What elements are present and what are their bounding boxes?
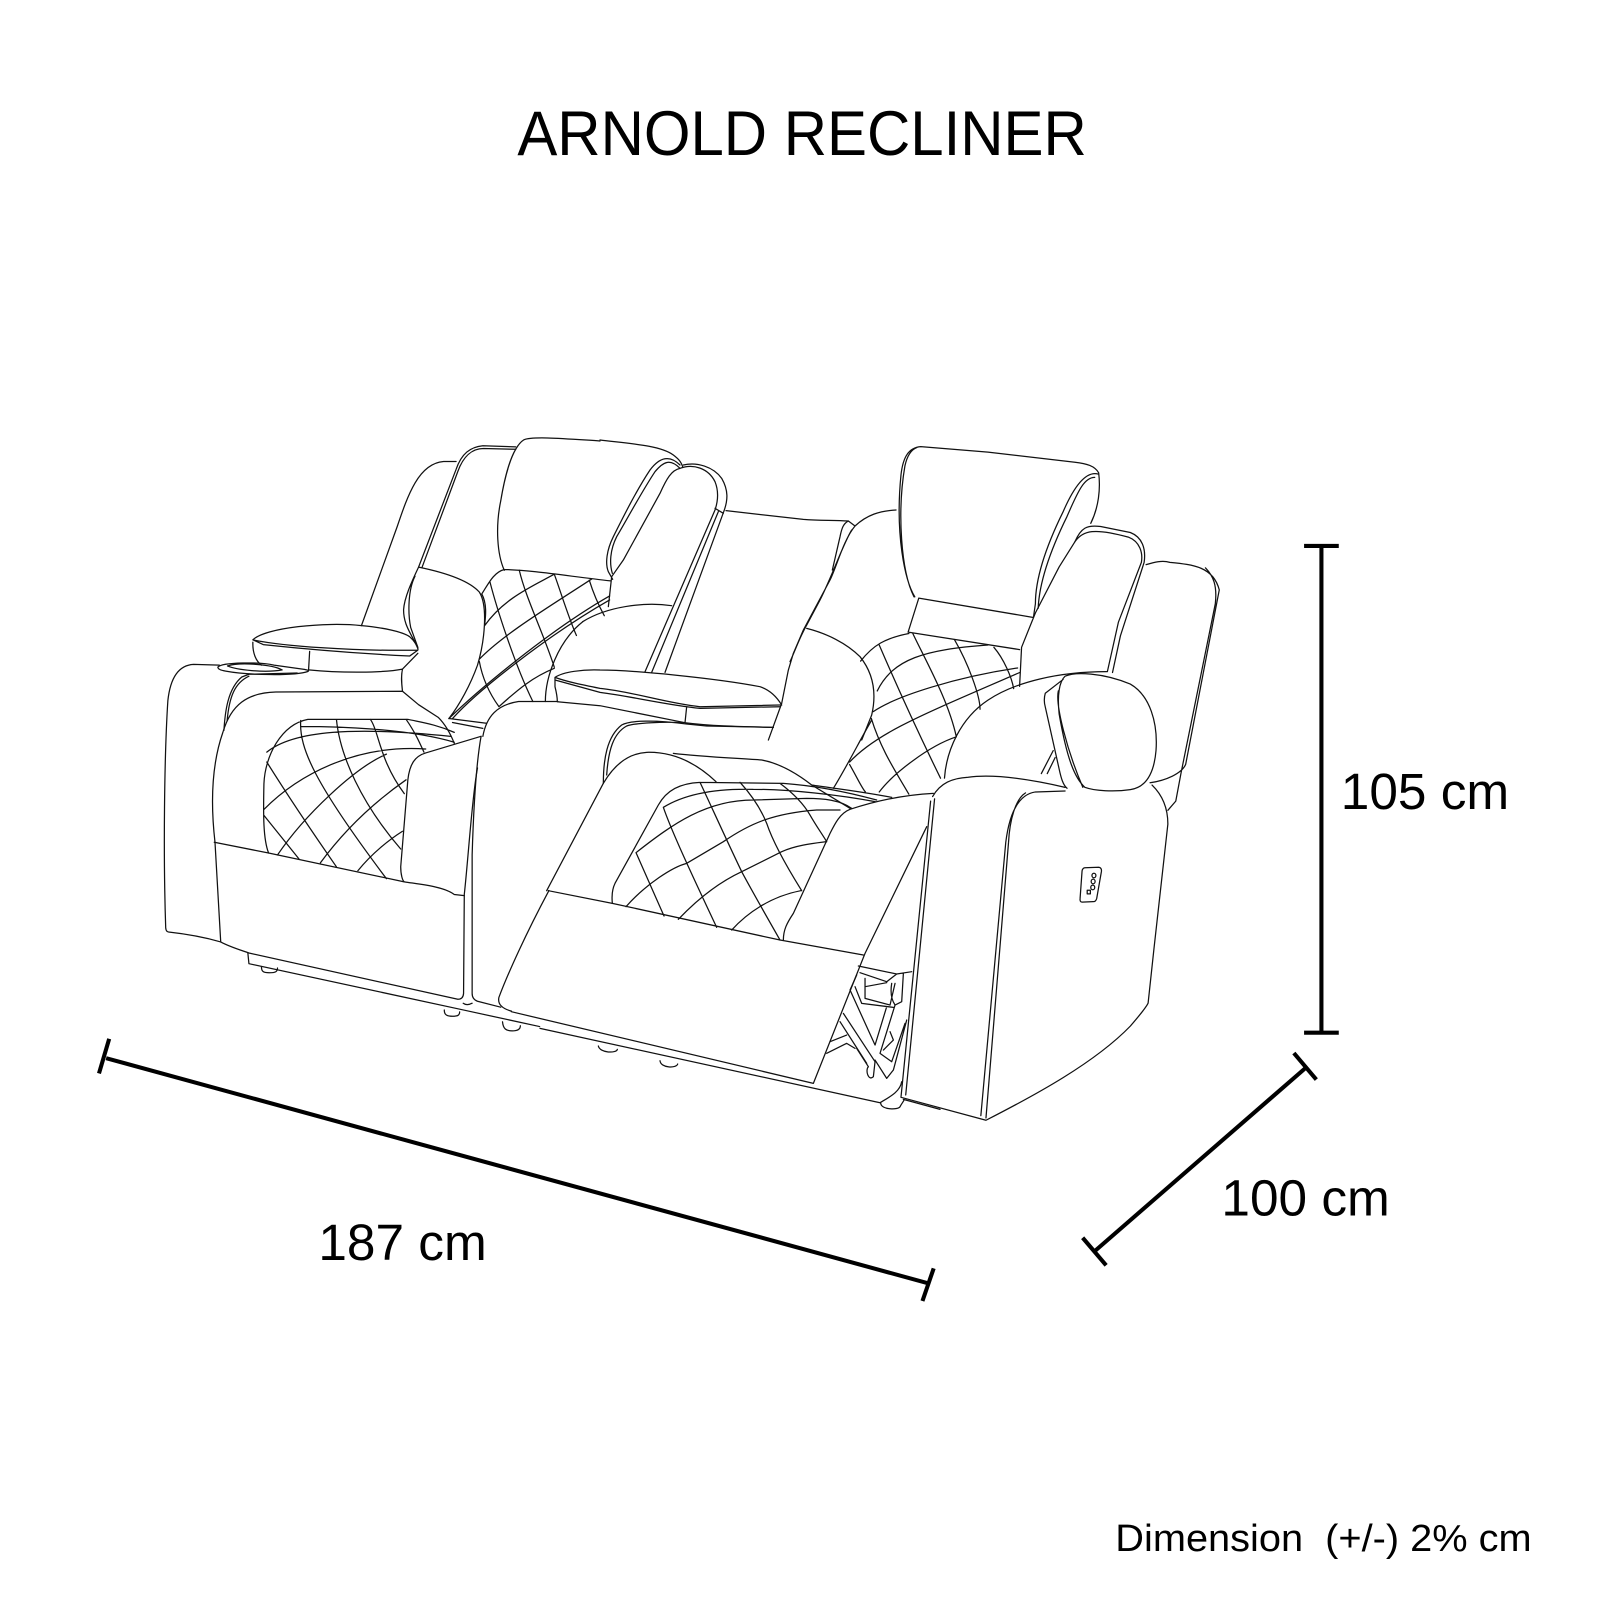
footrest: [511, 827, 927, 1083]
side band: [224, 673, 297, 730]
right recliner seat and footrest: [511, 720, 940, 1109]
power button panel: [1080, 867, 1101, 902]
base and feet: [248, 953, 540, 1031]
left headrest right edge: [600, 440, 683, 607]
height label: 105 cm: [1341, 763, 1509, 820]
lumbar panel: [807, 628, 874, 740]
back diamond quilting: [449, 569, 610, 719]
seat diamond quilting: [264, 719, 454, 879]
centre console: [555, 670, 782, 727]
right pillow top: [583, 604, 672, 622]
inner arm cushion: [401, 736, 481, 896]
right pillow: [545, 622, 583, 702]
wing: [404, 446, 516, 649]
outer arm panel: [164, 664, 221, 942]
recline mechanism: [827, 966, 912, 1078]
centre back and console: [555, 440, 896, 740]
right wing: [1075, 526, 1145, 673]
back cushion curves: [547, 720, 892, 891]
armrest console: [253, 624, 418, 691]
width dimension: [99, 1039, 934, 1301]
depth dimension: [1083, 1053, 1316, 1265]
right headrest: [899, 447, 1099, 617]
headrest: [498, 438, 611, 581]
seat wing between: [645, 464, 727, 672]
depth label: 100 cm: [1221, 1169, 1390, 1226]
cup holder: [218, 663, 309, 675]
footrest edge: [499, 891, 549, 1011]
seam: [449, 719, 486, 728]
right recliner back and arm: [850, 447, 1219, 1120]
outer back panel: [1146, 561, 1219, 810]
inner wing: [603, 721, 773, 783]
sofa line drawing: [164, 438, 1219, 1120]
title: ARNOLD RECLINER: [517, 99, 1087, 169]
headrest neck: [908, 542, 1075, 686]
backrest outer: [361, 462, 456, 626]
left recliner seat: [164, 438, 611, 1031]
console side: [472, 702, 558, 1007]
right arm: [901, 776, 1168, 1120]
tolerance note: Dimension (+/-) 2% cm: [1115, 1517, 1532, 1560]
base and feet: [540, 1028, 940, 1109]
centre back: [726, 510, 896, 740]
front arm: [213, 691, 478, 999]
back diamond quilting: [850, 634, 1020, 794]
height dimension: [1304, 546, 1339, 1033]
inner arm cushion: [783, 793, 933, 940]
arm dome: [944, 672, 1107, 778]
seat diamond quilting: [612, 782, 877, 940]
seat front seam: [214, 842, 404, 882]
width label: 187 cm: [318, 1214, 487, 1271]
lumbar panel: [419, 567, 485, 719]
right armrest cap: [1044, 674, 1156, 791]
